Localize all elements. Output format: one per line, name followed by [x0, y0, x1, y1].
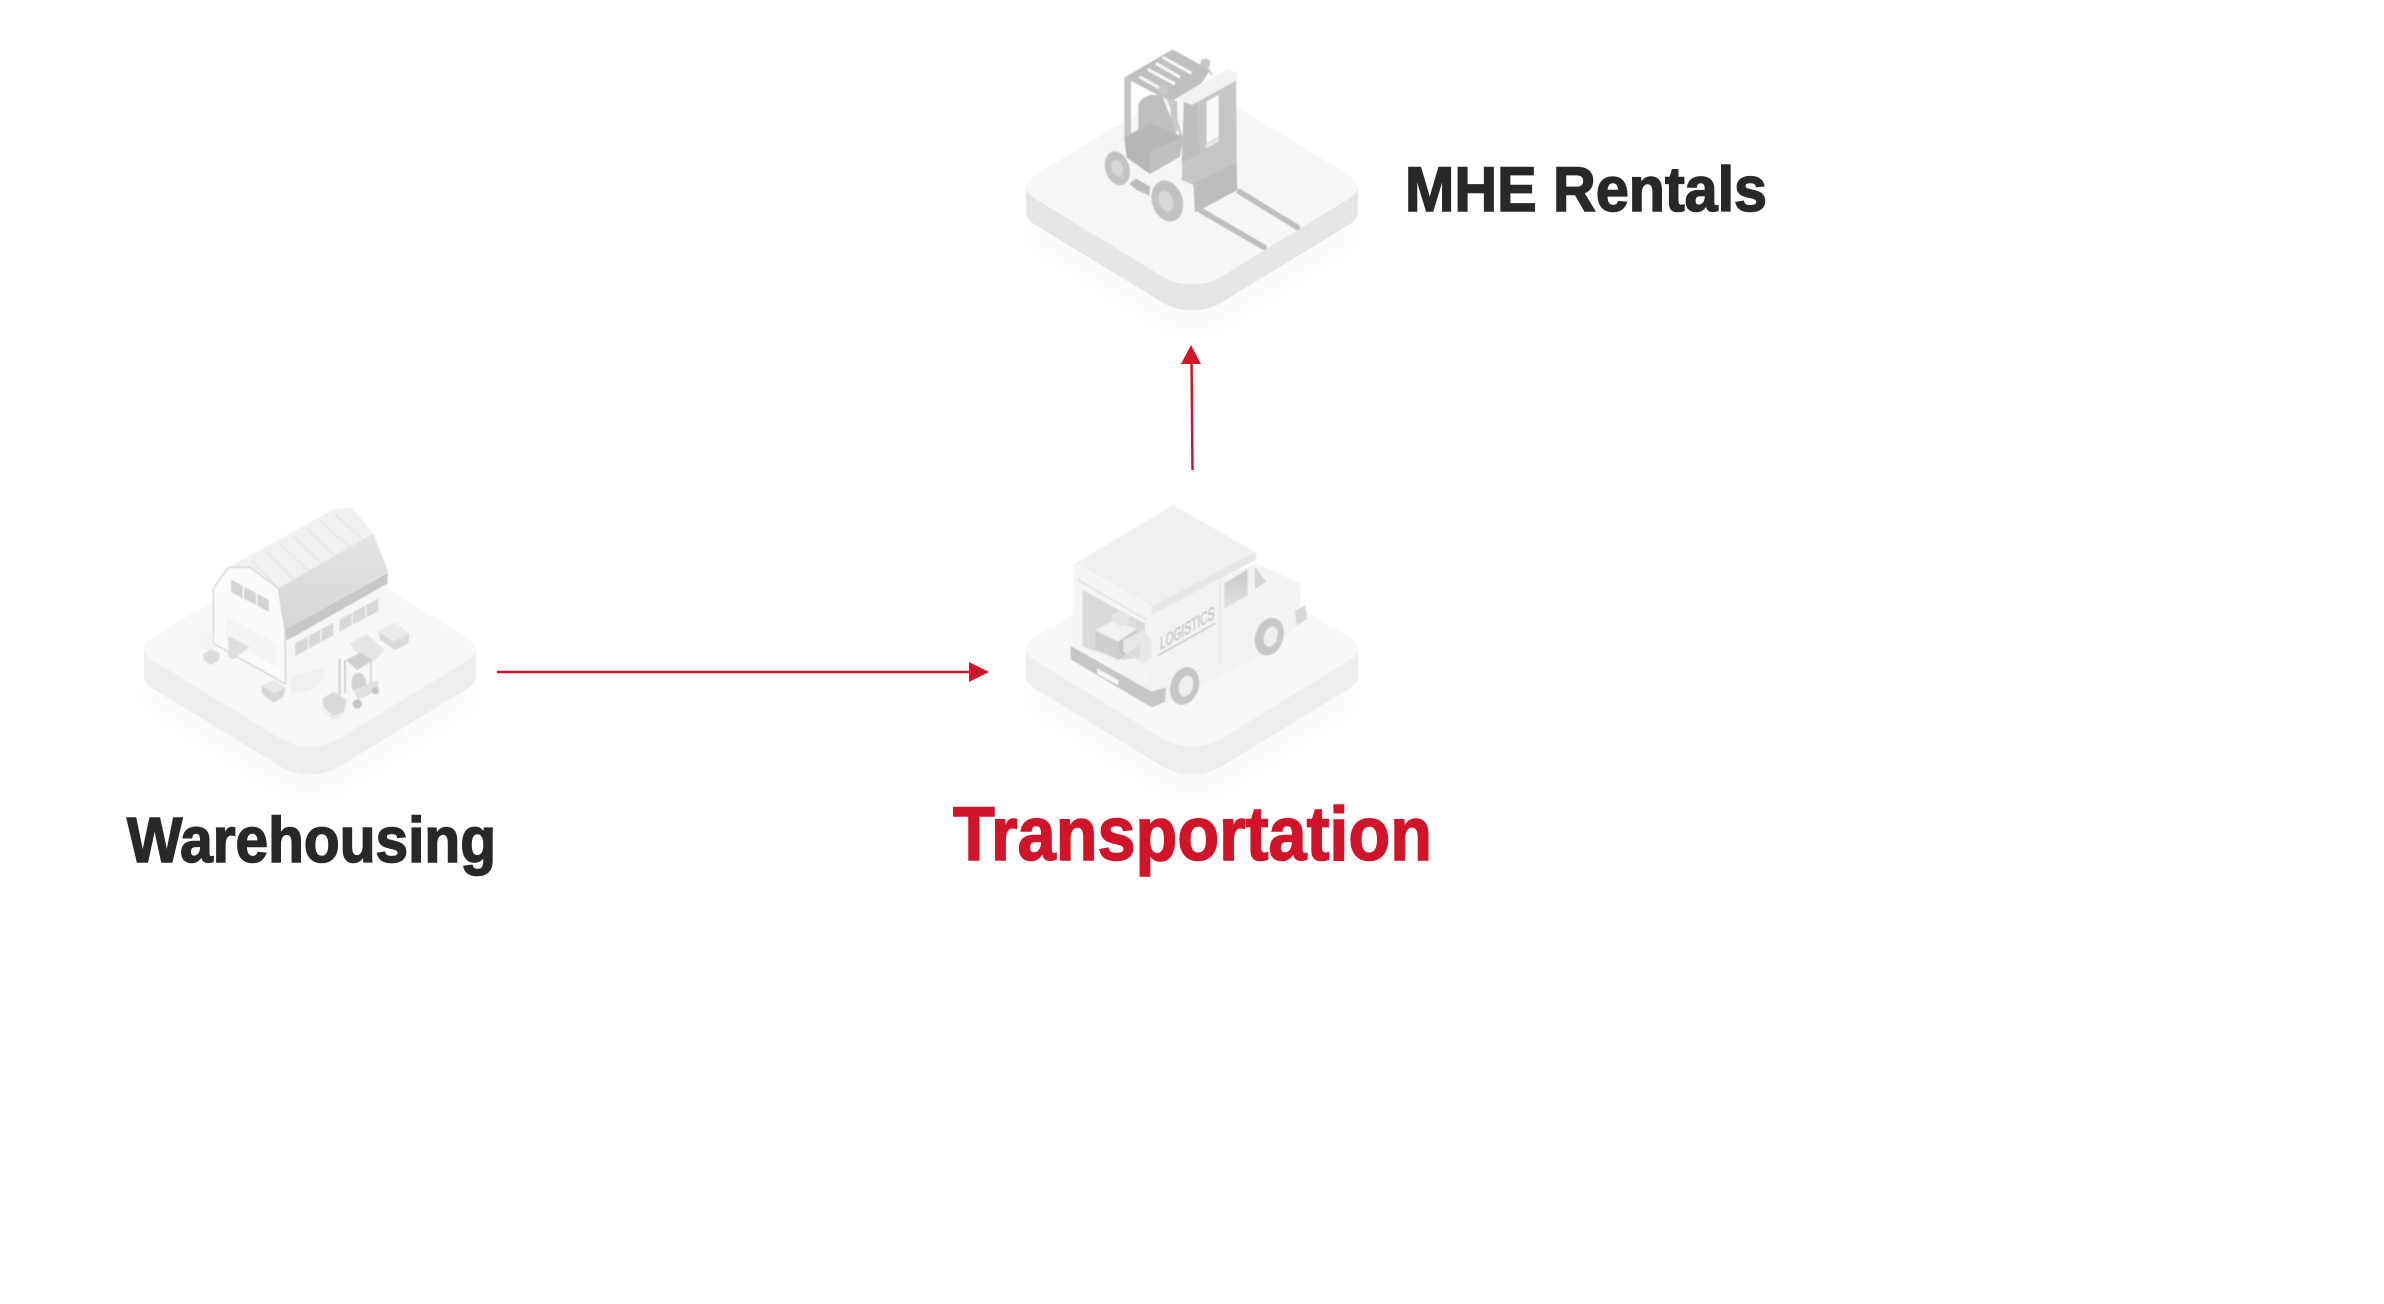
platform: transportation [1026, 552, 1358, 794]
label: LOGISTICS on truck: LOGISTICS [1160, 602, 1214, 654]
icon: warehouse building [200, 507, 409, 720]
platform: warehousing [144, 552, 476, 794]
icon: delivery truck [1071, 505, 1307, 709]
heading: MHE Rentals: MHE Rentals [1405, 155, 1767, 225]
icon: transportation platform [1026, 505, 1358, 794]
icon: small forklift [319, 652, 379, 720]
heading: Transportation: Transportation [953, 792, 1432, 877]
arrow: warehousing to transportation [497, 662, 989, 682]
platform: MHE [1026, 90, 1358, 330]
heading: Warehousing: Warehousing [127, 804, 496, 876]
arrow: transportation to MHE rentals [1181, 345, 1201, 470]
icon: MHE rentals forklift platform [1026, 49, 1358, 331]
icon: forklift [1101, 49, 1297, 247]
icon: warehousing platform [144, 507, 476, 794]
